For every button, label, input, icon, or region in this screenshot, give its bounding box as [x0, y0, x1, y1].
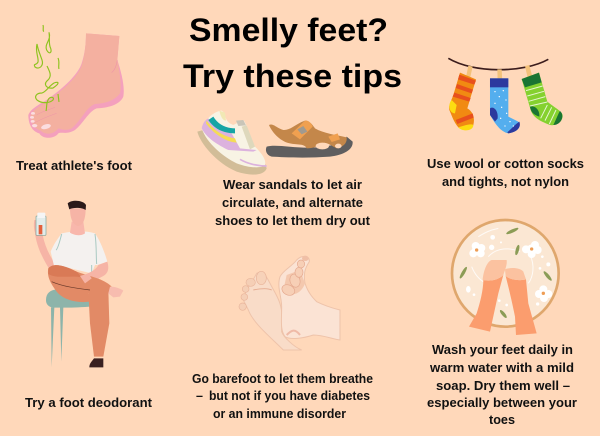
thigh: [48, 265, 112, 302]
green sock: [522, 73, 563, 125]
caption: sandals: shoes to let them dry out: [215, 214, 371, 228]
left foot: [239, 271, 302, 350]
caption: wash: toes: [489, 413, 515, 427]
caption: socks: and tights, not nylon: [442, 175, 569, 189]
caption: socks: Use wool or cotton socks: [427, 157, 584, 171]
caption: barefoot: [192, 372, 373, 421]
lower leg: [88, 290, 109, 357]
blue sock: [490, 78, 520, 133]
title: Smelly feet?: [189, 12, 388, 48]
caption: deodorant: Try a foot deodorant: [25, 396, 153, 410]
raised arm: [35, 233, 56, 270]
head: [70, 208, 86, 226]
caption: wash: [427, 343, 577, 427]
flowers: [466, 235, 552, 306]
icon: foot-washing basin: [452, 220, 559, 335]
caption: wash: especially between your: [427, 396, 577, 410]
caption: barefoot: or an immune disorder: [213, 407, 346, 421]
icon: man with deodorant on stool: [34, 201, 123, 367]
forearm: [80, 262, 108, 283]
caption: wash: soap. Dry them well –: [436, 379, 570, 393]
shoe: [89, 358, 103, 367]
hand: [80, 273, 92, 283]
feet: [483, 260, 507, 281]
caption: sandals: [215, 178, 371, 228]
caption: barefoot: –: [196, 389, 203, 403]
stool: [46, 289, 108, 367]
leaves: [459, 227, 553, 319]
title: [183, 12, 402, 94]
caption: wash: Wash your feet daily in: [432, 343, 573, 357]
caption: barefoot: Go barefoot to let them breathe: [192, 372, 373, 386]
icon: sneaker: [197, 111, 267, 175]
caption: treat athlete's foot: Treat athlete's foot: [16, 159, 133, 173]
icon: sandal: [266, 121, 353, 158]
icon: bare feet: [239, 256, 340, 350]
caption: sandals: Wear sandals to let air: [223, 178, 362, 192]
right foot: [279, 256, 340, 340]
bare foot: [108, 287, 123, 297]
neck: [70, 222, 85, 235]
legs: [469, 275, 503, 332]
icon: socks on a line: [448, 58, 563, 133]
caption: barefoot: but not if you have diabetes: [209, 389, 370, 403]
hair: [68, 201, 86, 210]
orange sock: [449, 73, 476, 130]
caption: sandals: circulate, and alternate: [222, 196, 363, 210]
title: Try these tips: [183, 58, 402, 94]
deodorant: [34, 213, 46, 235]
icon: smelly foot: [28, 25, 124, 138]
caption: wash: warm water with a mild: [429, 361, 574, 375]
shirt: [51, 231, 107, 273]
caption: socks: [427, 157, 584, 189]
